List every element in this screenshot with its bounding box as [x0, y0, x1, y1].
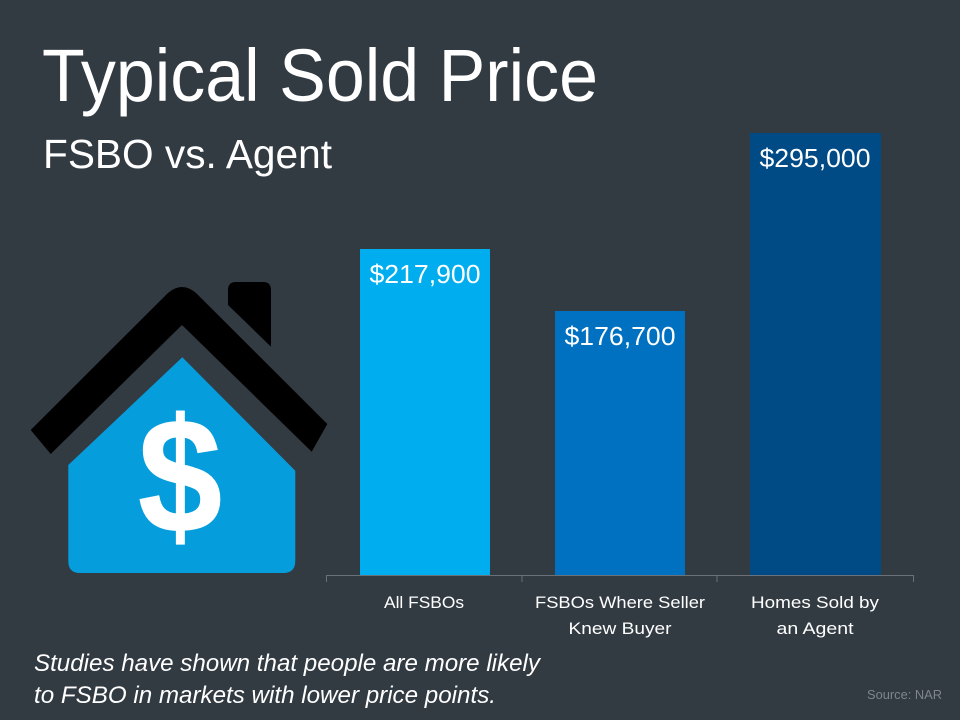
note text — [34, 650, 542, 709]
category label: Homes Sold by an Agent: an Agent — [776, 619, 854, 638]
icon: chimney — [228, 282, 271, 347]
icon: dollar sign: $ — [138, 384, 222, 567]
bar: All FSBOs — [360, 249, 490, 575]
bar: FSBOs Where Seller Knew Buyer — [555, 311, 685, 575]
note text: Studies have shown that people are more likely — [34, 650, 542, 677]
bar: All FSBOs: $217,900 — [370, 259, 480, 289]
source: Source: NAR — [867, 687, 942, 702]
category label: All FSBOs: All FSBOs — [384, 593, 464, 612]
category label: Homes Sold by an Agent: Homes Sold by — [751, 593, 880, 612]
category label: FSBOs Where Seller Knew Buyer: FSBOs Where Seller — [535, 593, 705, 612]
icon: roof — [31, 287, 327, 454]
icon: house body — [68, 357, 295, 573]
title: Typical Sold Price — [42, 34, 598, 117]
bar: FSBOs Where Seller Knew Buyer: $176,700 — [564, 321, 676, 351]
category label: Homes Sold by an Agent — [751, 593, 880, 638]
category label: FSBOs Where Seller Knew Buyer — [535, 593, 705, 638]
subtitle: FSBO vs. Agent — [43, 131, 333, 177]
bar: Homes Sold by an Agent: $295,000 — [760, 143, 870, 173]
bar chart — [326, 133, 914, 638]
note text: to FSBO in markets with lower price points. — [34, 682, 496, 709]
icon: house with dollar sign — [31, 282, 327, 573]
category label: FSBOs Where Seller Knew Buyer: Knew Buyer — [568, 619, 672, 638]
bar: Homes Sold by an Agent — [750, 133, 881, 575]
